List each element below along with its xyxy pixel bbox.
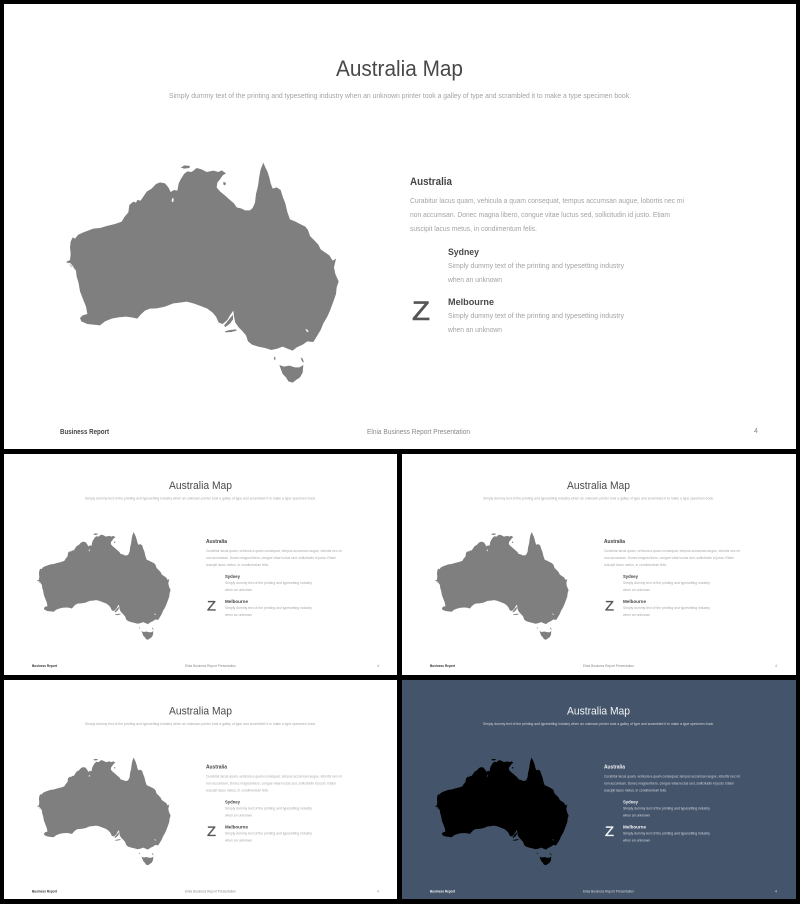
thumbnail text: Simply dummy text of the printing and typesetting industry when an unknown printer took a galley of type and scrambled it to make a type specimen book. — [483, 496, 714, 500]
thumbnail text: 4 — [377, 890, 379, 894]
thumbnail text: Australia Map — [567, 480, 630, 492]
thumbnail text: non accumsan. Donec magna libero, congue vitae luctus sed, sollicitudin id justo. Etiam — [206, 556, 336, 560]
thumbnail text: non accumsan. Donec magna libero, congue vitae luctus sed, sollicitudin id justo. Etiam — [206, 782, 336, 786]
entry: Sydney: Simply dummy text of the printing and typesetting industry — [448, 261, 624, 270]
body text: suscipit lacus metus, in condimentum felis. — [410, 224, 537, 233]
panel: thumbnail slide dark — [402, 680, 796, 899]
entry: Sydney: when an unknown — [447, 275, 502, 284]
heading: Australia: Australia — [410, 176, 453, 188]
footer — [60, 428, 758, 436]
thumbnail text: Elnia Business Report Presentation — [583, 664, 634, 668]
thumbnail text — [32, 480, 379, 668]
thumbnail text: when an unknown — [225, 613, 252, 617]
thumbnail text: Simply dummy text of the printing and typesetting industry — [225, 581, 312, 585]
thumbnail text: when an unknown — [623, 814, 650, 818]
thumbnail text: Sydney — [225, 574, 241, 579]
footer: Elnia Business Report Presentation — [367, 429, 470, 436]
thumbnail text: Australia Map — [567, 706, 630, 718]
thumbnail text: Melbourne — [623, 599, 647, 604]
icon: Z: Z — [412, 296, 430, 326]
thumbnail text: Z — [207, 823, 216, 839]
thumbnail text: Sydney — [623, 574, 639, 579]
thumbnail text: Curabitur lacus quam, vehicula a quam consequat, tempus accumsan augue, lobortis nec mi — [604, 774, 740, 778]
thumbnail text: Curabitur lacus quam, vehicula a quam consequat, tempus accumsan augue, lobortis nec mi — [206, 549, 342, 553]
thumbnail text: Simply dummy text of the printing and typesetting industry — [623, 806, 710, 810]
thumbnail text: Business Report — [32, 890, 58, 894]
subtitle: Simply dummy text of the printing and typesetting industry when an unknown printer took a galley of type and scrambled it to make a type specimen book. — [169, 91, 631, 100]
thumbnail text — [430, 706, 777, 894]
thumbnail text: Sydney — [225, 800, 241, 804]
thumbnail text: suscipit lacus metus, in condimentum felis. — [206, 788, 269, 792]
thumbnail text: Simply dummy text of the printing and typesetting industry when an unknown printer took a galley of type and scrambled it to make a type specimen book. — [85, 496, 316, 500]
body text: Curabitur lacus quam, vehicula a quam consequat, tempus accumsan augue, lobortis nec mi — [410, 196, 684, 205]
thumbnail text: Elnia Business Report Presentation — [185, 890, 236, 894]
panel: thumbnail slide bottom left — [4, 680, 397, 899]
entry: Sydney — [447, 247, 624, 284]
thumbnail text: Australia — [604, 764, 625, 770]
thumbnail text: 4 — [775, 664, 777, 668]
thumbnail text: non accumsan. Donec magna libero, congue vitae luctus sed, sollicitudin id justo. Etiam — [604, 556, 734, 560]
entry: Sydney: Sydney — [448, 247, 480, 258]
thumbnail text: 4 — [775, 890, 777, 894]
panel: thumbnail slide top left — [4, 454, 397, 675]
thumbnail text: when an unknown — [623, 588, 650, 592]
entry: Melbourne: when an unknown — [447, 325, 502, 334]
thumbnail text: when an unknown — [623, 613, 650, 617]
thumbnail text: Curabitur lacus quam, vehicula a quam consequat, tempus accumsan augue, lobortis nec mi — [206, 774, 342, 778]
thumbnail text: when an unknown — [225, 814, 252, 818]
thumbnail text: Simply dummy text of the printing and typesetting industry when an unknown printer took a galley of type and scrambled it to make a type specimen book. — [483, 722, 714, 726]
thumbnail text: Australia Map — [169, 706, 232, 718]
thumbnail text: when an unknown — [225, 838, 252, 842]
thumbnail text: Australia Map — [169, 480, 232, 492]
thumbnail text: Curabitur lacus quam, vehicula a quam consequat, tempus accumsan augue, lobortis nec mi — [604, 549, 740, 553]
entry: Melbourne: Simply dummy text of the printing and typesetting industry — [448, 311, 624, 320]
entry: Melbourne — [447, 297, 624, 334]
thumbnail text: Simply dummy text of the printing and typesetting industry — [623, 832, 710, 836]
map of Australia — [37, 758, 171, 865]
map of Australia — [435, 532, 569, 640]
thumbnail text — [32, 706, 379, 894]
map of Australia — [37, 532, 171, 640]
panel: thumbnail slide top right — [402, 454, 796, 675]
thumbnail text — [430, 480, 777, 668]
thumbnail text: Simply dummy text of the printing and typesetting industry — [623, 606, 710, 610]
footer: 4 — [754, 428, 758, 435]
thumbnail text: Z — [605, 823, 614, 839]
thumbnail text: Simply dummy text of the printing and typesetting industry — [225, 606, 312, 610]
thumbnail text: Melbourne — [225, 599, 249, 604]
thumbnail text: non accumsan. Donec magna libero, congue vitae luctus sed, sollicitudin id justo. Etiam — [604, 782, 734, 786]
thumbnail text: when an unknown — [225, 588, 252, 592]
thumbnail text: when an unknown — [623, 838, 650, 842]
body text — [410, 196, 684, 233]
thumbnail text: Melbourne — [225, 824, 249, 830]
thumbnail text: Elnia Business Report Presentation — [583, 890, 634, 894]
thumbnail text: Simply dummy text of the printing and typesetting industry when an unknown printer took a galley of type and scrambled it to make a type specimen book. — [85, 722, 316, 726]
thumbnail text: Business Report — [430, 890, 456, 894]
thumbnail text: Sydney — [623, 800, 639, 804]
thumbnail text: Australia — [206, 539, 227, 545]
thumbnail text: Simply dummy text of the printing and typesetting industry — [225, 832, 312, 836]
thumbnail text: Australia — [206, 764, 227, 770]
thumbnail text: Business Report — [430, 664, 456, 668]
thumbnail text: Simply dummy text of the printing and typesetting industry — [623, 581, 710, 585]
thumbnail text: Z — [605, 598, 614, 614]
thumbnail text: Simply dummy text of the printing and typesetting industry — [225, 806, 312, 810]
thumbnail text: suscipit lacus metus, in condimentum felis. — [206, 563, 269, 567]
body text: non accumsan. Donec magna libero, congue vitae luctus sed, sollicitudin id justo. Etiam — [410, 210, 670, 219]
thumbnail text: Australia — [604, 539, 625, 545]
map of Australia — [66, 163, 339, 383]
thumbnail text: suscipit lacus metus, in condimentum felis. — [604, 788, 667, 792]
thumbnail text: Z — [207, 598, 216, 614]
thumbnail text: Elnia Business Report Presentation — [185, 664, 236, 668]
map of Australia — [435, 758, 569, 865]
panel: main slide — [4, 4, 796, 449]
footer: Business Report — [60, 429, 110, 436]
title: Australia Map — [336, 56, 463, 81]
thumbnail text: Melbourne — [623, 824, 647, 830]
entry: Melbourne: Melbourne — [448, 297, 494, 308]
thumbnail text: Business Report — [32, 664, 58, 668]
thumbnail text: 4 — [377, 664, 379, 668]
thumbnail text: suscipit lacus metus, in condimentum felis. — [604, 563, 667, 567]
